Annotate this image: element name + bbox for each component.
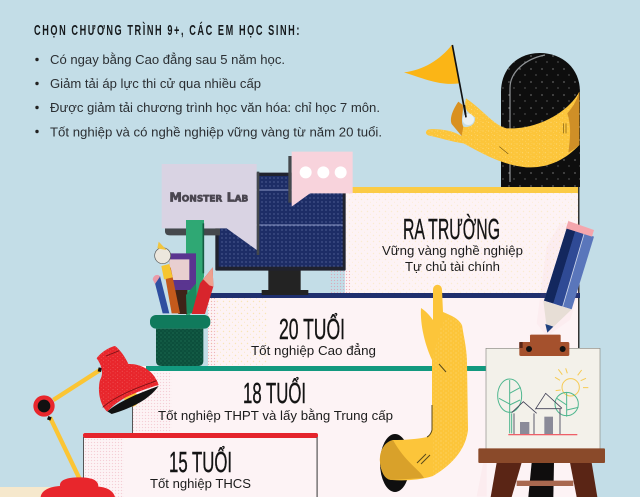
- pot body: [156, 329, 203, 366]
- step text: 18 tuổi: [158, 376, 393, 423]
- halftone: [477, 350, 487, 497]
- eraser: [566, 221, 594, 237]
- houses drawing: [512, 393, 562, 434]
- easel shelf: [478, 448, 605, 463]
- step text: ra trường: [382, 213, 523, 274]
- three dots: [300, 166, 347, 178]
- lamp base: [41, 477, 115, 497]
- sun drawing: [555, 368, 588, 396]
- monitor screen: [215, 173, 346, 271]
- bullet list: Có ngay bằng Cao đẳng sau 5 năm học.: [50, 52, 285, 67]
- paint brush: [164, 267, 180, 313]
- red pencil: [192, 267, 213, 314]
- lamp bulb: [124, 392, 139, 407]
- step text: 15 tuổi: 15 TUỔI: [169, 445, 232, 479]
- easel legs: [491, 463, 522, 497]
- icon: easel with drawing: [477, 335, 605, 497]
- bullet list: [35, 52, 382, 140]
- bullet list: Giảm tải áp lực thi cử qua nhiều cấp: [50, 76, 261, 91]
- lamp joint: [33, 395, 55, 417]
- pot rim: [150, 315, 210, 329]
- sleeve opening: [380, 434, 410, 492]
- arm creases: [417, 364, 446, 464]
- bullet list: Tốt nghiệp và có nghề nghiệp vững vàng từ năm 20 tuổi.: [50, 124, 382, 140]
- hand and arm: [380, 285, 468, 480]
- step text: ra trường: RA TRƯỜNG: [403, 213, 500, 246]
- blue pencil: [154, 276, 169, 313]
- yellow arm: [426, 92, 579, 167]
- thumb: [451, 102, 463, 136]
- trees drawing: [498, 379, 578, 433]
- step text: 18 tuổi: 18 TUỔI: [243, 376, 306, 410]
- step text: 18 tuổi: Tốt nghiệp THPT và lấy bằng Trung cấp: [158, 408, 393, 423]
- pencil body: [544, 228, 594, 309]
- step text: 15 tuổi: [150, 445, 251, 491]
- step text: 20 tuổi: 20 TUỔI: [279, 312, 345, 346]
- monitor stand: [262, 269, 308, 295]
- icon: flag and reaching hand: [404, 44, 579, 167]
- step text: 15 tuổi: Tốt nghiệp THCS: [150, 476, 251, 491]
- cuff: [380, 440, 424, 480]
- lamp shade: [97, 346, 159, 412]
- right speech bubble: [292, 152, 353, 207]
- step panel: ra trường: [330, 187, 580, 367]
- left bubble shadow: [165, 172, 259, 255]
- step panel: 20 tuổi: [208, 293, 580, 368]
- intro text block: [34, 22, 382, 140]
- step panel: 15 tuổi: [83, 433, 318, 497]
- step text: ra trường: Tự chủ tài chính: [405, 259, 500, 274]
- step panel: 18 tuổi: [132, 366, 578, 497]
- halftone: [537, 223, 580, 337]
- book: [169, 253, 196, 285]
- brand text: Monster Lab: [169, 189, 248, 204]
- step text: 20 tuổi: [251, 312, 376, 358]
- right bubble shadow: [288, 156, 292, 203]
- left speech bubble: [162, 164, 257, 250]
- lamp arms: [50, 370, 100, 478]
- ground strip: [0, 487, 90, 497]
- ruler: [186, 220, 204, 315]
- icon: flag: [404, 44, 459, 84]
- intro heading: CHỌN CHƯƠNG TRÌNH 9+, CÁC EM HỌC SINH:: [34, 22, 301, 39]
- easel clip: [519, 335, 569, 356]
- icon: pencil: [537, 221, 594, 337]
- step text: ra trường: Vững vàng nghề nghiệp: [382, 243, 523, 258]
- canvas: [486, 348, 600, 449]
- icon: monitor with speech bubbles: [162, 152, 353, 295]
- arm texture: [426, 92, 579, 167]
- flag pole: [452, 45, 466, 117]
- arm texture: [432, 318, 468, 476]
- sleeve shade: [567, 92, 579, 153]
- finger hole: [463, 114, 474, 125]
- black door: [501, 53, 580, 187]
- ground line: [508, 433, 577, 436]
- icon: pointing hand: [380, 285, 468, 492]
- icon: pencil pot: [150, 220, 213, 366]
- green triangle: [186, 283, 197, 313]
- pencil tip: [543, 301, 572, 333]
- icon: desk lamp: [33, 346, 159, 497]
- lamp shade inner: [107, 386, 159, 414]
- step text: 20 tuổi: Tốt nghiệp Cao đẳng: [251, 343, 376, 358]
- bullet list: Được giảm tải chương trình học văn hóa: chỉ học 7 môn.: [50, 100, 380, 115]
